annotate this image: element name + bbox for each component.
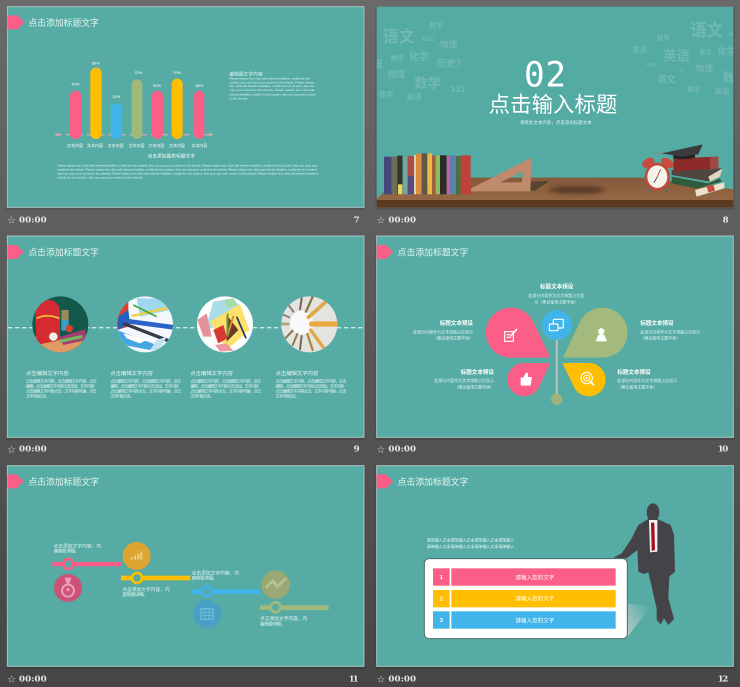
watermark subject words: 英语 xyxy=(714,86,730,96)
title marker xyxy=(7,474,24,488)
row 2: 2 xyxy=(440,597,443,603)
heading: 点击添加标题文字 xyxy=(398,476,468,487)
text columns: 文字内容点击。 xyxy=(110,394,134,399)
side text block: 编辑图文字内容 xyxy=(229,71,263,78)
body paragraph xyxy=(57,164,319,180)
footer: slide 11: 11 xyxy=(349,674,359,684)
text columns: 点击编辑文字内容 xyxy=(110,369,154,377)
panel: slide 8 section title xyxy=(373,7,740,227)
step 1 xyxy=(52,542,121,602)
photo: pencils in a ring xyxy=(281,296,338,352)
text columns: 点击编辑文字内容 xyxy=(276,369,319,377)
watermark subject words: 语文 xyxy=(690,21,723,40)
heading: 点击添加标题文字 xyxy=(28,17,99,28)
text columns: 文字内容点击。 xyxy=(276,394,299,399)
footer: slide 11: 00:00 xyxy=(19,674,47,684)
text columns: 点击编辑文字内容 xyxy=(26,369,69,377)
step 4: 容简要详细。 xyxy=(260,620,285,627)
bar chart: 文本内容 xyxy=(129,142,145,148)
body paragraph: Please replace text, click add relevant headline, modify the text content, also can copy your content to this directly. Please replace text, click add relevant headline, modify the text content, also can copy your xyxy=(57,164,317,168)
panel: slide 12 businessman with list xyxy=(375,466,735,686)
watermark subject words: A xyxy=(728,29,734,38)
footer: slide 8: ☆ xyxy=(376,216,385,227)
bar chart: 55% xyxy=(153,83,161,88)
photo: blue markers xyxy=(117,296,173,352)
text: lower left item: （建议使用主题字体） xyxy=(454,383,494,389)
footer: slide 7 xyxy=(7,215,360,227)
row 3: 3 xyxy=(440,618,443,624)
text columns: 文字内容点击。 xyxy=(190,394,214,399)
icon: devices xyxy=(549,319,563,331)
watermark subject words: 数学 xyxy=(699,47,712,56)
row 3: 请输入您的文字 xyxy=(515,616,555,624)
footer: slide 7: ☆ xyxy=(7,216,16,227)
body paragraph: also can copy your content to this directly. Please replace text, click add relevant headline, modify the text content, also can copy your content to this directly. Please replace text, click add relevant headline, xyxy=(57,172,319,176)
watermark subject words: 物理 xyxy=(696,62,713,73)
footer: slide 12: ☆ xyxy=(376,675,385,686)
watermark subject words: 历史？ xyxy=(437,58,466,70)
title marker xyxy=(377,474,393,488)
footer: slide 8: 8 xyxy=(723,215,729,225)
photo: coloured pencils xyxy=(197,296,253,352)
icon: target xyxy=(581,372,594,385)
text: upper left item: （建议使用主题字体） xyxy=(433,335,473,341)
footer: slide 12: 12 xyxy=(718,674,728,684)
text: top item: 此部分内容作为文字排版占位显 xyxy=(528,292,584,298)
bar chart: 文本内容 xyxy=(108,142,124,148)
text: lower right item xyxy=(617,368,677,389)
alarm clock xyxy=(640,153,675,192)
side text block: relevant headline, modify the text content, also can copy your content xyxy=(229,92,316,96)
text: lower left item: 此部分内容作为文字排版占位显示 xyxy=(434,377,494,383)
text columns: 点击编辑文字内容点击，文字内容可编，点击 xyxy=(26,389,97,394)
photo: backpack xyxy=(32,296,88,352)
text: lower right item: 此部分内容作为文字排版占位显示 xyxy=(617,377,677,383)
row 1 xyxy=(433,568,616,586)
bar chart xyxy=(55,60,213,148)
body paragraph: content to this directly. Please replace text, click add relevant headline, modify the text content, also can copy your content to this directly. Please replace text, click add relevant headline, modify the text content, xyxy=(57,168,317,172)
text columns: 编辑，点击编辑文字内容点击添加，文字内容 xyxy=(276,384,344,389)
section heading: 点击输入标题 xyxy=(489,93,617,117)
intro text: 请单输入文本请单输入文本请单输入文本请单输入 xyxy=(427,543,514,549)
icon: edit note xyxy=(505,329,517,341)
text: lower left item: 标题文本预设 xyxy=(461,368,494,376)
light beam xyxy=(627,604,652,637)
watermark subject words: 英语 xyxy=(632,45,648,54)
panel: slide 11 stepped timeline xyxy=(6,466,365,686)
footer: slide 9: 00:00 xyxy=(19,445,47,455)
bar chart: 文本内容 xyxy=(67,142,83,148)
text: lower left item xyxy=(434,368,494,389)
watermark subject words: 语文 xyxy=(657,74,675,85)
icon: thumbs up xyxy=(521,373,532,386)
footer: slide 7: 00:00 xyxy=(19,215,47,225)
step 1: 容简要详细。 xyxy=(54,547,79,554)
watermark subject words: 化学 xyxy=(717,45,736,56)
heading: 点击添加标题文字 xyxy=(28,476,99,487)
watermark subject words: 英语 xyxy=(407,93,422,102)
side text block: Please replace text, click add relevant headline, modify the text xyxy=(229,77,310,81)
text: upper right item: （建议使用主题字体） xyxy=(640,335,680,341)
footer: slide 8 xyxy=(376,215,729,227)
text: upper right item: 此部分内容作为文字排版占位显示 xyxy=(640,328,700,334)
side text block: text, click add relevant headline, modify the text content, also can xyxy=(229,84,315,88)
bar chart: 文本内容 xyxy=(148,142,164,148)
panel: slide 10 petal diagram xyxy=(375,236,735,456)
text: top item xyxy=(528,283,584,305)
list card xyxy=(424,559,627,639)
text: top item: 标题文本预设 xyxy=(540,283,574,291)
footer: slide 10: 00:00 xyxy=(388,445,416,455)
text columns: 点击编辑文字内容点击，文字内容可编，点击 xyxy=(110,389,181,394)
text columns: 编辑，点击编辑文字内容点击添加，文字内容 xyxy=(26,384,94,389)
watermark subject words: 语 xyxy=(373,57,383,70)
text columns: 点击编辑文字内容点击，文字内容可编，点击 xyxy=(276,389,346,394)
text: upper right item xyxy=(640,319,700,341)
petal diagram xyxy=(486,308,628,405)
watermark subject words: 物理 xyxy=(387,68,405,79)
watermark subject words: 物理 xyxy=(440,38,458,49)
footer: slide 11 xyxy=(7,674,359,686)
row 3 xyxy=(433,611,616,629)
step 3: 点击添加文字内容，内 xyxy=(192,570,239,577)
step 4 xyxy=(260,570,329,627)
step 4: 点击添加文字内容，内 xyxy=(260,615,308,622)
bar chart: 70% xyxy=(173,70,181,75)
step 3: 容简要详细。 xyxy=(192,575,217,582)
bar chart: 25% xyxy=(112,94,121,99)
text columns: 点击编辑文字内容，点击编辑文字内容，点击 xyxy=(26,379,97,384)
text columns: 点击编辑文字内容点击，文字内容可编，点击 xyxy=(190,389,261,394)
section subtitle: 请将此文本内容，点击添加标题文本 xyxy=(520,119,592,126)
side text block: to this directly. xyxy=(229,96,248,100)
text: upper left item: 此部分内容作为文字排版占位显示 xyxy=(413,328,473,334)
step 1: 点击添加文字内容，内 xyxy=(54,542,101,549)
watermark subject words: 数学 xyxy=(687,85,701,94)
title marker xyxy=(377,245,393,259)
footer: slide 9: 9 xyxy=(354,445,360,455)
intro text xyxy=(427,537,514,549)
footer: slide 10: 10 xyxy=(718,445,728,455)
text: lower right item: 标题文本预设 xyxy=(617,368,651,376)
watermark subject words: 123 xyxy=(451,84,465,94)
footer: slide 11: ☆ xyxy=(7,675,16,686)
text columns: 点击编辑文字内容，点击编辑文字内容，点击 xyxy=(190,379,261,384)
watermark subject words: 数学 xyxy=(657,34,670,43)
text columns: 文字内容点击。 xyxy=(26,394,49,399)
row 2: 请输入您的文字 xyxy=(515,595,555,603)
watermark subject words: 化学 xyxy=(409,50,429,63)
heading: 点击添加标题文字 xyxy=(398,247,468,258)
bar chart: 文本内容 xyxy=(169,142,185,148)
text columns: 点击编辑文字内容，点击编辑文字内容，点击 xyxy=(110,379,181,384)
row 1: 1 xyxy=(440,575,443,581)
watermark subject words: ABC xyxy=(421,36,435,43)
watermark subject words: 数学 xyxy=(391,53,404,62)
panel: slide 9 four photos xyxy=(6,236,365,456)
step 2: 点击添加文字内容，内 xyxy=(122,586,170,593)
text: top item: 示（建议使用主题字体） xyxy=(534,299,578,305)
bar chart: 文本内容 xyxy=(87,142,103,148)
text columns xyxy=(26,369,346,399)
stacked books, cap and diploma xyxy=(662,144,724,197)
watermark subject words: ABC xyxy=(646,62,656,67)
watermark subject words: 语文 xyxy=(383,27,415,46)
footer: slide 8: 00:00 xyxy=(388,215,416,225)
heading: 点击添加标题文字 xyxy=(28,247,99,258)
watermark subject words xyxy=(373,21,740,102)
side text block: copy your content to this directly. Please replace text, click add xyxy=(229,88,315,92)
footer: slide 12 xyxy=(376,674,728,686)
icon: person xyxy=(596,328,607,341)
text: upper right item: 标题文本预设 xyxy=(640,319,674,327)
text columns: 编辑，点击编辑文字内容点击添加，文字内容 xyxy=(190,384,259,389)
footer: slide 12: 00:00 xyxy=(388,674,416,684)
businessman silhouette xyxy=(613,503,675,625)
footer: slide 10: ☆ xyxy=(376,445,385,456)
dashed timeline xyxy=(8,326,363,330)
panel: slide 7 bar chart xyxy=(6,7,365,227)
section number: 02 xyxy=(524,56,566,96)
wooden shelf xyxy=(377,178,733,207)
step 3 xyxy=(192,570,260,628)
watermark subject words: > xyxy=(680,69,684,75)
watermark subject words: 数学 xyxy=(379,90,393,99)
intro text: 请单输入文本请单输入文本请单输入文本请单输入 xyxy=(427,537,514,543)
footer: slide 7: 7 xyxy=(354,215,360,225)
side text block: content, also can copy your content to this directly. Please replace xyxy=(229,80,315,84)
row 1: 请输入您的文字 xyxy=(515,573,555,581)
text: lower right item: （建议使用主题字体） xyxy=(617,383,657,389)
title marker xyxy=(7,245,24,259)
text: upper left item xyxy=(413,319,473,341)
triangle ruler xyxy=(471,158,549,191)
bar chart: 80% xyxy=(92,60,100,65)
text: upper left item: 标题文本预设 xyxy=(440,319,473,327)
watermark subject words: 英语 xyxy=(663,48,690,64)
side text block xyxy=(229,71,316,100)
step 2: 容简要详细。 xyxy=(122,591,148,598)
watermark subject words: 数学 xyxy=(414,74,441,90)
bar chart: 55% xyxy=(195,83,204,88)
title marker xyxy=(7,15,24,29)
footer: slide 10 xyxy=(376,445,728,456)
watermark subject words: 数学 xyxy=(429,21,443,30)
text columns: 点击编辑文字内容，点击编辑文字内容，点击 xyxy=(276,379,346,384)
step 2 xyxy=(121,542,190,598)
books on shelf xyxy=(384,153,471,194)
body paragraph: modify the text content, also can copy your content to this directly. xyxy=(57,176,143,180)
text columns: 编辑，点击编辑文字内容点击添加，文字内容 xyxy=(110,384,179,389)
footer: slide 9: ☆ xyxy=(7,445,16,456)
bar chart: 文本内容 xyxy=(191,142,207,148)
bar chart: 45% xyxy=(71,81,80,86)
row 2 xyxy=(433,590,616,607)
chart caption: 点击添加图表标题文字 xyxy=(148,152,195,159)
bar chart: 70% xyxy=(134,70,143,75)
footer: slide 9 xyxy=(7,445,360,456)
text columns: 点击编辑文字内容 xyxy=(190,369,234,377)
